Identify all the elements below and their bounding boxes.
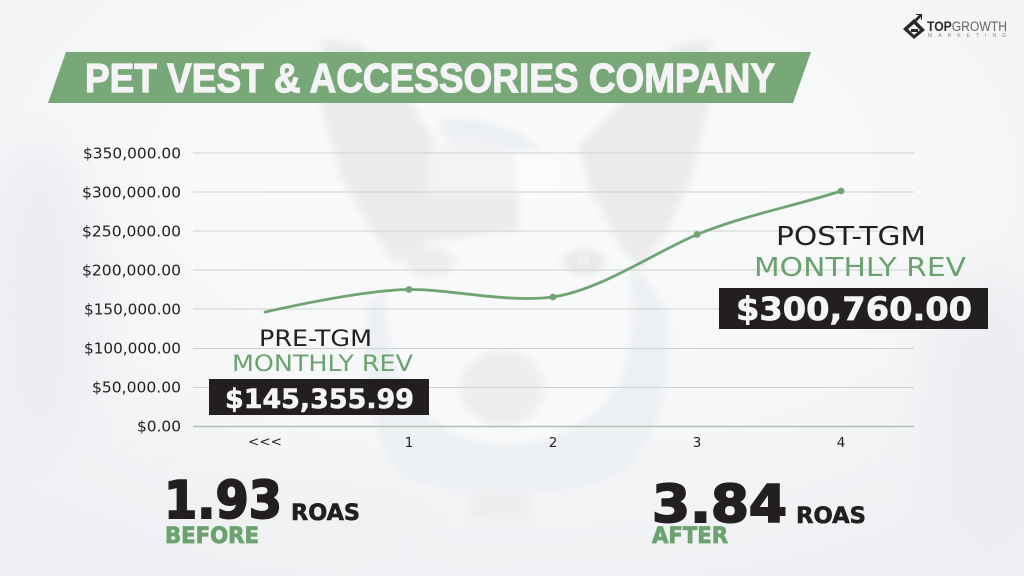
logo: Top Growth Marketing: TOPGROWTH (927, 19, 1007, 34)
callout: post-TGM monthly revenue (719, 222, 988, 329)
line chart (82, 144, 914, 451)
stat: ROAS after: ROAS (796, 504, 866, 529)
y axis labels: $0.00 (137, 418, 181, 436)
callout: post-TGM monthly revenue: POST-TGM (776, 222, 926, 252)
stat: ROAS after: 3.84 (652, 475, 787, 535)
callout: pre-TGM monthly revenue: MONTHLY REV (232, 352, 413, 377)
stat: ROAS before (164, 471, 360, 549)
x axis labels: <<< (248, 434, 282, 450)
stat: ROAS before: ROAS (291, 501, 360, 526)
x axis labels: 2 (549, 435, 557, 451)
icon: growth arrow diamond (903, 14, 925, 39)
y axis labels: $150,000.00 (84, 300, 181, 318)
y axis labels: $50,000.00 (92, 378, 181, 396)
callout: pre-TGM monthly revenue: PRE-TGM (259, 327, 372, 352)
callout: post-TGM monthly revenue: $300,760.00 (736, 290, 972, 328)
logo: Top Growth Marketing (903, 14, 1007, 39)
x axis labels: 3 (693, 435, 701, 451)
callout: pre-TGM monthly revenue (209, 327, 429, 415)
y axis labels: $250,000.00 (82, 222, 181, 240)
y axis labels (82, 144, 181, 436)
x axis labels: 1 (405, 435, 413, 451)
revenue line (264, 188, 844, 313)
y axis labels: $100,000.00 (84, 340, 181, 358)
callout: pre-TGM monthly revenue: $145,355.99 (225, 384, 414, 415)
title banner: PET VEST & ACCESSORIES COMPANY (85, 55, 775, 101)
stat: ROAS after: AFTER (652, 524, 728, 549)
x axis labels (248, 434, 845, 451)
stat: ROAS before: BEFORE (165, 524, 259, 549)
stat: ROAS after (652, 475, 866, 549)
stat: ROAS before: 1.93 (164, 471, 282, 531)
x axis labels: 4 (837, 435, 845, 451)
y axis labels: $350,000.00 (83, 144, 181, 162)
y axis labels: $200,000.00 (82, 262, 181, 280)
logo: Top Growth Marketing: MARKETING (928, 33, 1006, 39)
callout: post-TGM monthly revenue: MONTHLY REV (754, 253, 966, 283)
y axis labels: $300,000.00 (82, 184, 181, 202)
